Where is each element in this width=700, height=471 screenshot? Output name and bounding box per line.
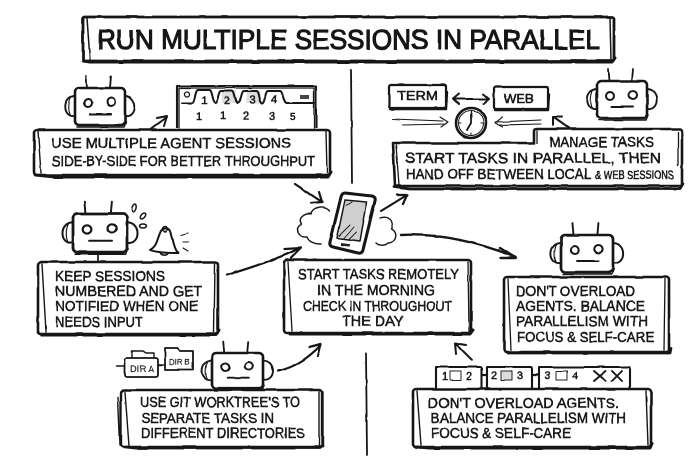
robot: manage tasks [587, 69, 657, 120]
panel: overload agents: FOCUS & SELF-CARE [517, 329, 654, 346]
panel: numbered sessions [38, 262, 219, 335]
icon: folders: DIR B [169, 357, 190, 367]
panel: multiple agent sessions: SIDE-BY-SIDE FOR BETTER THROUGHPUT [52, 153, 315, 170]
icon: session tabs: 2 [491, 370, 497, 382]
panel: numbered sessions: KEEP SESSIONS [55, 268, 165, 285]
arrow: tabs to centre [455, 343, 472, 360]
icon: session tabs [436, 367, 630, 389]
icon: terminal with tabs: 1 [201, 95, 207, 107]
robot: worktrees [202, 342, 273, 390]
arrow: to terminal [147, 116, 167, 132]
panel: worktrees [118, 390, 323, 448]
title: RUN MULTIPLE SESSIONS IN PARALLEL [97, 24, 600, 55]
panel: manage tasks [393, 129, 683, 189]
icon: session tabs: 3 [544, 370, 550, 382]
icon: terminal with tabs: 4 [271, 94, 277, 106]
panel: numbered sessions: NEEDS INPUT [55, 314, 143, 331]
robot: sessions [65, 76, 135, 127]
robot: overload [551, 223, 623, 274]
panel: multiple agent sessions: USE MULTIPLE AGENT SESSIONS [51, 135, 291, 152]
arrow: to web [553, 117, 573, 131]
icon: terminal with tabs: 1 [220, 110, 226, 122]
arrow: into clock from left [393, 117, 448, 127]
title [83, 17, 615, 62]
panel: remote tasks [284, 260, 473, 334]
icon: session tabs: 3 [517, 370, 523, 382]
panel: worktrees: USE GIT WORKTREE'S TO [140, 394, 300, 411]
arrow: term to web [453, 94, 489, 104]
arrow: numbered panel to centre [227, 248, 301, 275]
panel: remote tasks: IN THE MORNING [317, 282, 435, 299]
icon: terminal with tabs: 3 [269, 111, 275, 123]
panel: numbered sessions: NOTIFIED WHEN ONE [55, 298, 198, 315]
panel: balance parallelism: FOCUS & SELF-CARE [431, 425, 571, 442]
robot: numbered sessions [62, 202, 138, 254]
icon: phone [330, 193, 375, 253]
arrow: worktrees to centre [278, 344, 321, 371]
panel: numbered sessions: NUMBERED AND GET [55, 283, 202, 300]
icon: terminal with tabs: 1 [196, 111, 202, 123]
panel: manage tasks: MANAGE TASKS [549, 134, 654, 151]
panel: remote tasks: CHECK IN THROUGHOUT [303, 298, 452, 315]
panel: overload agents: DON'T OVERLOAD [516, 283, 635, 300]
icon: folders: DIR A [130, 364, 155, 375]
icon: notification marks [131, 204, 147, 228]
icon: terminal with tabs: 3 [249, 94, 255, 106]
arrow: into clock from right [495, 117, 541, 127]
icon: folders [117, 348, 193, 377]
panel: multiple agent sessions [34, 130, 331, 177]
divider: upper centre [351, 70, 352, 183]
divider: lower centre [366, 353, 367, 455]
icon: web button: WEB [504, 91, 534, 106]
icon: terminal with tabs: 5 [290, 112, 296, 123]
panel: remote tasks: START TASKS REMOTELY [298, 266, 459, 283]
panel: worktrees: SEPARATE TASKS IN [141, 410, 274, 427]
panel: balance parallelism: DON'T OVERLOAD AGENTS. [428, 395, 619, 412]
icon: term button: TERM [397, 88, 438, 103]
icon: session tabs: 4 [572, 370, 578, 382]
panel: manage tasks: HAND OFF BETWEEN LOCAL [406, 166, 591, 183]
connector: robot to panel [97, 252, 99, 262]
panel: overload agents [504, 277, 671, 353]
icon: term button [389, 85, 447, 109]
arrow: phone to manage panel [381, 195, 407, 211]
icon: cloud left [297, 207, 329, 244]
icon: web button [494, 87, 549, 110]
icon: cloud right [376, 217, 395, 245]
panel: worktrees: DIFFERENT DIRECTORIES [141, 425, 305, 442]
icon: session tabs: 2 [466, 371, 472, 383]
panel: balance parallelism: BALANCE PARALLELISM WITH [431, 410, 626, 427]
panel: overload agents: AGENTS. BALANCE [516, 298, 645, 315]
panel: remote tasks: THE DAY [342, 313, 403, 330]
arrow: phone to overload panel [401, 235, 516, 258]
icon: session tabs: 1 [442, 371, 448, 383]
panel: balance parallelism [413, 389, 652, 448]
panel: manage tasks: START TASKS IN PARALLEL, THEN [405, 150, 661, 167]
panel: manage tasks: & WEB SESSIONS [595, 170, 674, 182]
icon: terminal with tabs: 2 [224, 95, 230, 107]
panel: overload agents: PARALLELISM WITH [516, 313, 648, 330]
icon: clock [456, 108, 486, 138]
icon: bell [150, 226, 189, 255]
icon: terminal with tabs [177, 86, 316, 128]
icon: terminal with tabs: 2 [243, 110, 249, 122]
arrow: to phone [295, 184, 322, 203]
